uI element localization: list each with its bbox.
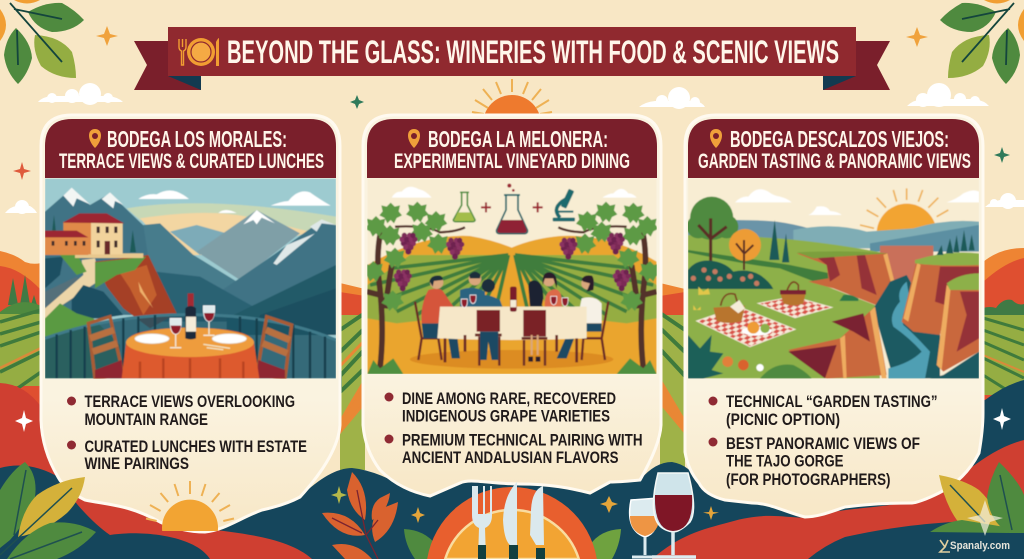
leaves: bottom left — [0, 462, 96, 559]
title ribbon — [134, 27, 890, 90]
bottom hills — [0, 380, 1024, 559]
bullets: ANCIENT ANDALUSIAN FLAVORS — [402, 448, 618, 467]
card shape — [41, 115, 340, 532]
leaves: top left — [0, 0, 84, 84]
center-right gap landscape — [660, 283, 685, 470]
heading: BODEGA LA MELONERA: — [428, 126, 608, 152]
bullets: WINE PAIRINGS — [84, 454, 189, 473]
icon: plate and cutlery — [179, 38, 219, 66]
bullets: PREMIUM TECHNICAL PAIRING WITH — [402, 430, 642, 450]
heading — [367, 119, 657, 178]
brand credit: Spanaly.com — [950, 540, 1010, 552]
card shape — [685, 115, 983, 517]
bullets: (PICNIC OPTION) — [726, 410, 840, 429]
icons: flasks and microscope — [453, 184, 575, 234]
diners at table — [415, 272, 608, 366]
bullets: TECHNICAL “GARDEN TASTING” — [726, 392, 938, 411]
plate and cutlery — [404, 482, 621, 559]
left side landscape — [0, 251, 40, 405]
right side landscape — [984, 248, 1024, 400]
leaves: bottom right — [930, 462, 1024, 536]
heading: BODEGA LOS MORALES: — [107, 126, 287, 152]
heading — [688, 119, 979, 178]
vines and grapes — [362, 202, 661, 374]
bottom sun — [146, 481, 234, 531]
heading — [45, 119, 336, 178]
icon: second knife — [530, 486, 545, 559]
heading: EXPERIMENTAL VINEYARD DINING — [394, 150, 630, 173]
bullets — [708, 392, 938, 489]
bullets: BEST PANORAMIC VIEWS OF — [726, 434, 920, 453]
heading: TERRACE VIEWS & CURATED LUNCHES — [59, 150, 324, 173]
panel: Bodega Los Morales — [41, 115, 340, 532]
bullets: MOUNTAIN RANGE — [84, 410, 208, 429]
sprig: orange leaves — [322, 472, 398, 559]
bullets: (FOR PHOTOGRAPHERS) — [726, 470, 890, 489]
panel: Bodega La Melonera — [362, 115, 661, 496]
bullets: INDIGENOUS GRAPE VARIETIES — [402, 406, 610, 426]
bullets — [67, 392, 307, 473]
illustration: vineyard dining with science icons — [362, 178, 661, 374]
illustration: mountain terrace dining — [45, 178, 336, 379]
bullets: THE TAJO GORGE — [726, 452, 844, 470]
icon: knife — [503, 482, 518, 559]
leaves: top right — [940, 0, 1024, 84]
bullets — [384, 389, 642, 467]
illustration: picnic above the Tajo gorge — [687, 178, 979, 379]
small sparkles — [331, 486, 719, 523]
decorative clouds and sparkles — [5, 26, 1024, 432]
bullets: DINE AMONG RARE, RECOVERED — [402, 389, 616, 408]
top sun — [472, 79, 552, 114]
card shape — [363, 115, 661, 496]
wine glasses — [630, 473, 696, 557]
center-left gap landscape — [340, 283, 365, 470]
bullets: CURATED LUNCHES WITH ESTATE — [84, 437, 307, 456]
icon: fork — [472, 486, 492, 559]
bullets: TERRACE VIEWS OVERLOOKING — [84, 392, 295, 411]
panel: Bodega Descalzos Viejos — [685, 115, 983, 517]
